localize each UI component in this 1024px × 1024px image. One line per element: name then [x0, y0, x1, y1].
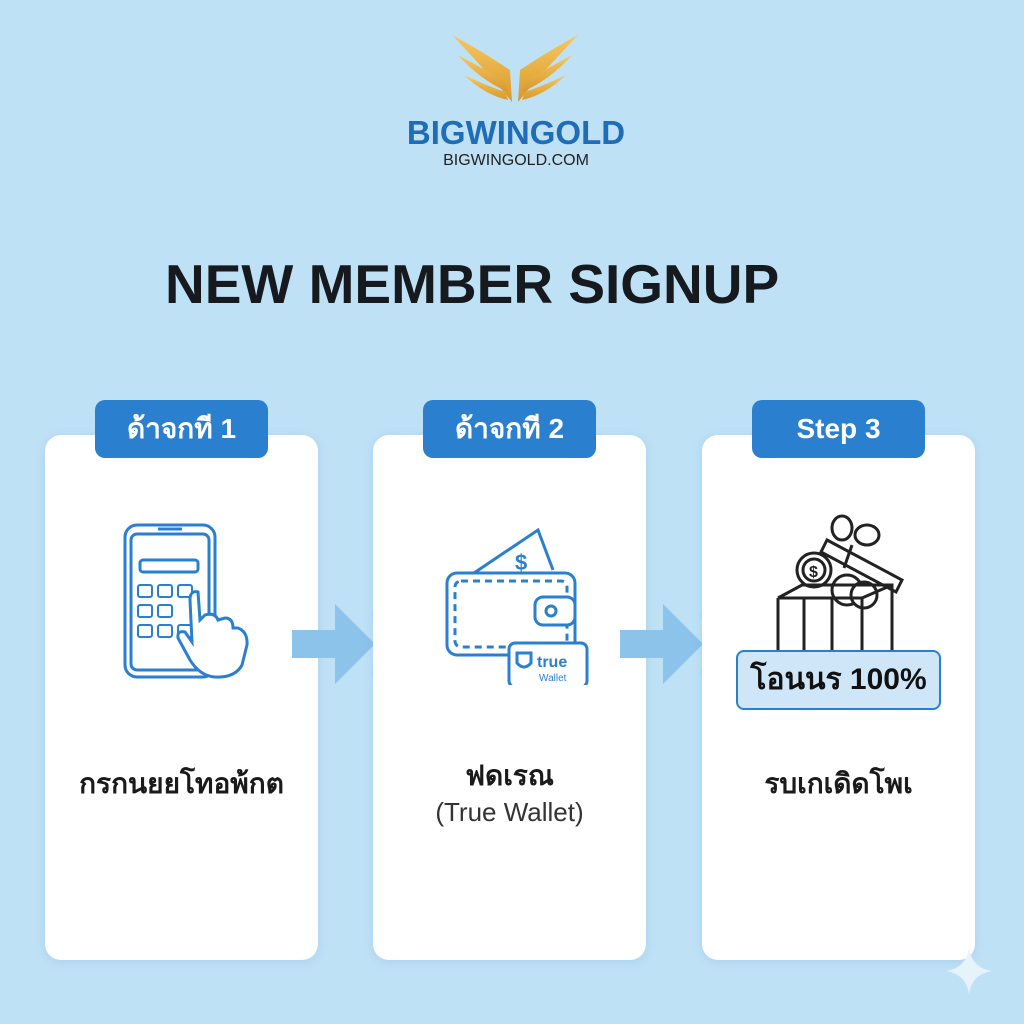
icon: phone — [124, 524, 249, 679]
sparkle — [946, 949, 992, 994]
label: step 3: รบเกเดิดโพเ — [764, 768, 913, 799]
title: NEW MEMBER SIGNUP — [165, 253, 779, 315]
icon: wallet: $ — [515, 550, 527, 575]
icon: wallet: Wallet — [539, 673, 567, 684]
icon: wallet — [446, 528, 588, 685]
icon: gift with coins: $ — [809, 564, 818, 581]
bonus tag — [736, 650, 941, 710]
label: step 1: กรกนยยโทอพ้กต — [79, 768, 284, 799]
panel: step 2 — [373, 435, 646, 960]
badge: step 2 — [423, 400, 596, 458]
label: step 2: ฟดเรณ — [465, 760, 554, 791]
label: step 2 — [435, 760, 584, 827]
bonus tag: โอนนร 100% — [750, 663, 927, 696]
badge: step 3 — [752, 400, 925, 458]
badge: step 3: Step 3 — [796, 413, 881, 444]
panel: step 3 — [702, 435, 975, 960]
logo: url: BIGWINGOLD.COM — [443, 152, 589, 169]
arrow 1 — [292, 604, 373, 684]
icon: gift with coins — [776, 514, 904, 650]
logo: brand name: BIGWINGOLD — [407, 114, 625, 151]
logo: wings — [452, 35, 578, 102]
arrow 2 — [620, 604, 702, 684]
badge: step 1: ด้าจกที 1 — [127, 413, 236, 444]
badge: step 2: ด้าจกที 2 — [455, 413, 564, 444]
panel: step 1 — [45, 435, 318, 960]
icon: wallet: true — [537, 654, 567, 671]
label: step 2: (True Wallet) — [435, 797, 584, 827]
badge: step 1 — [95, 400, 268, 458]
